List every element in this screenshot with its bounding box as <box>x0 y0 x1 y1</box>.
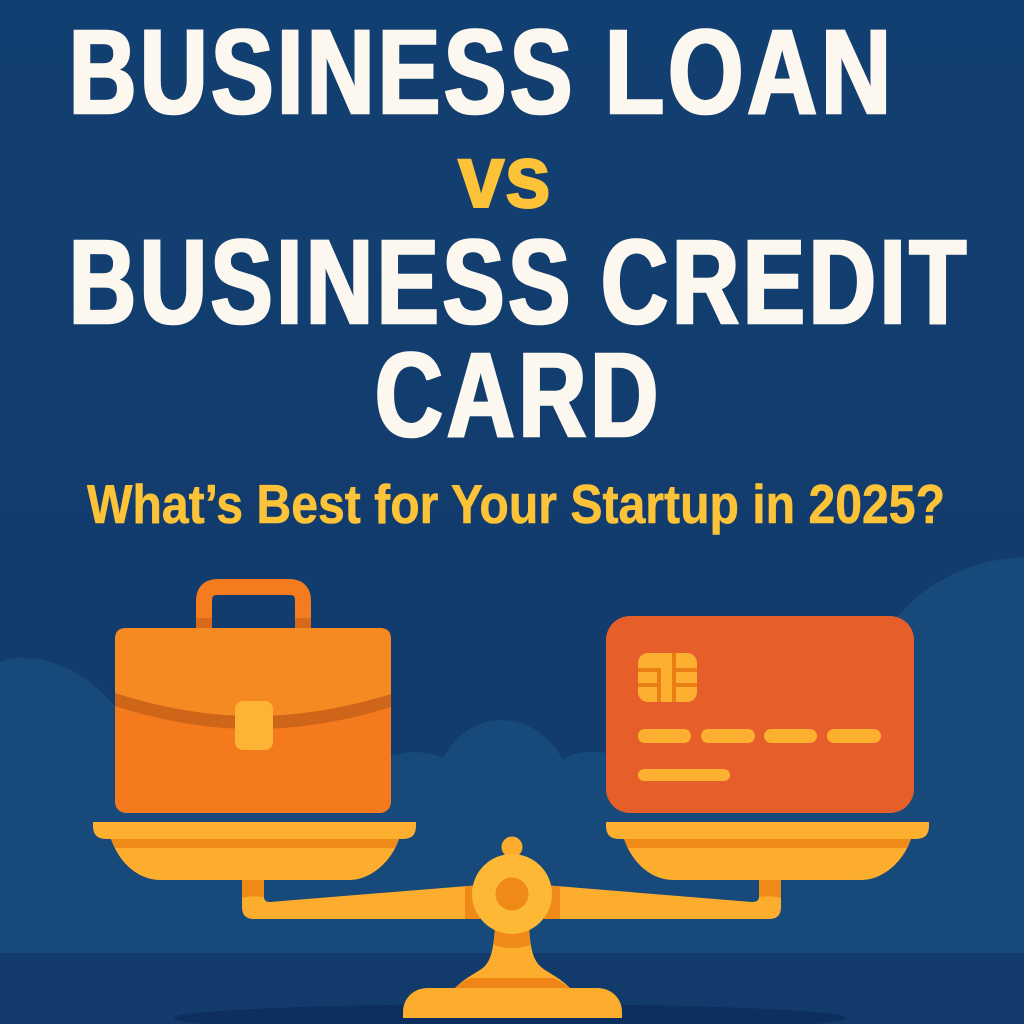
background clouds <box>0 557 1024 953</box>
title line: business loan: LOAN <box>605 3 895 139</box>
ground shadow <box>174 1004 846 1024</box>
scale base <box>403 988 622 1018</box>
ground <box>0 953 1024 1024</box>
scale pivot <box>472 854 552 934</box>
title <box>69 3 970 462</box>
briefcase handle <box>196 587 311 628</box>
title line: vs: vs <box>458 126 551 226</box>
card number dashes <box>638 729 881 743</box>
icon: credit card <box>606 616 914 813</box>
icon: balance scale <box>93 822 929 1018</box>
briefcase upper panel <box>115 628 391 716</box>
scale left pan <box>93 822 416 880</box>
scale beam right <box>544 880 781 919</box>
icon: briefcase <box>115 587 391 813</box>
briefcase body <box>115 628 391 813</box>
card chip <box>638 653 697 702</box>
scale right pan <box>606 822 929 880</box>
briefcase clasp <box>235 701 273 750</box>
scale knob <box>502 836 522 858</box>
card name line <box>638 769 730 781</box>
briefcase flap line <box>115 693 391 729</box>
title line: card: CARD <box>375 326 662 462</box>
title line: business loan: BUSINESS <box>69 3 576 139</box>
scale beam left <box>242 880 480 919</box>
card body <box>606 616 914 813</box>
title line: business credit: BUSINESS <box>69 213 574 349</box>
scale stand <box>403 925 622 1018</box>
